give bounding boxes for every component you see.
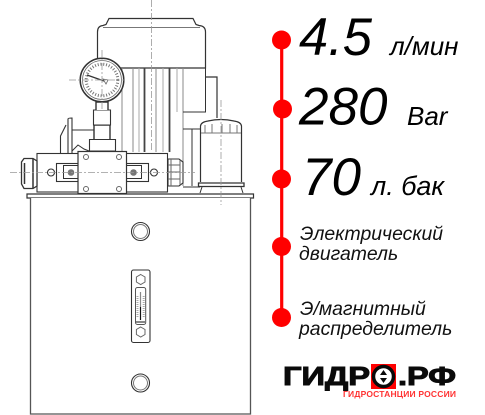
- flow value: 4.5: [299, 8, 373, 67]
- logo: ГИДР: [283, 361, 370, 391]
- logo tagline: ГИДРОСТАНЦИИ РОССИИ: [343, 389, 456, 399]
- oil tank: [30, 198, 250, 414]
- flow unit: л/мин: [388, 31, 458, 61]
- pressure gauge: [80, 58, 124, 102]
- pressure gauge stem: [90, 102, 116, 151]
- motor label: двигатель: [299, 243, 398, 265]
- lower tank port: [132, 374, 150, 392]
- valve label: Э/магнитный: [300, 298, 426, 320]
- spec marker: valve: [272, 308, 291, 327]
- spec marker: flow: [272, 30, 291, 50]
- centre manifold block: [78, 152, 126, 194]
- pressure unit: Bar: [407, 101, 449, 131]
- centre lines: [10, 0, 221, 205]
- electric motor: [98, 18, 217, 187]
- hydraulic station drawing: [10, 0, 254, 414]
- logo emblem: [371, 364, 396, 389]
- oil filter: [198, 120, 244, 193]
- red connector line: [280, 40, 283, 317]
- spec marker: motor: [272, 237, 291, 256]
- right solenoid: [126, 164, 158, 182]
- motor label: Электрический: [300, 223, 443, 245]
- logo: .РФ: [398, 361, 456, 391]
- pressure value: 280: [298, 78, 388, 136]
- logo: [283, 361, 456, 399]
- left solenoid: [48, 164, 78, 182]
- spec marker: pressure: [273, 100, 292, 118]
- tank top plate: [27, 194, 254, 198]
- valve label: распределитель: [298, 318, 452, 340]
- valve label: [298, 298, 452, 340]
- right solenoid cap: [168, 159, 183, 186]
- tank value: 70: [302, 148, 361, 207]
- motor label: [299, 223, 443, 265]
- upper tank port: [132, 222, 150, 240]
- oil level sight gauge: [132, 270, 150, 342]
- left solenoid cap: [22, 158, 37, 188]
- valve body: [37, 154, 168, 192]
- tank unit: л. бак: [369, 171, 445, 201]
- spec marker: tank: [272, 170, 291, 188]
- mounting bracket: [60, 118, 94, 153]
